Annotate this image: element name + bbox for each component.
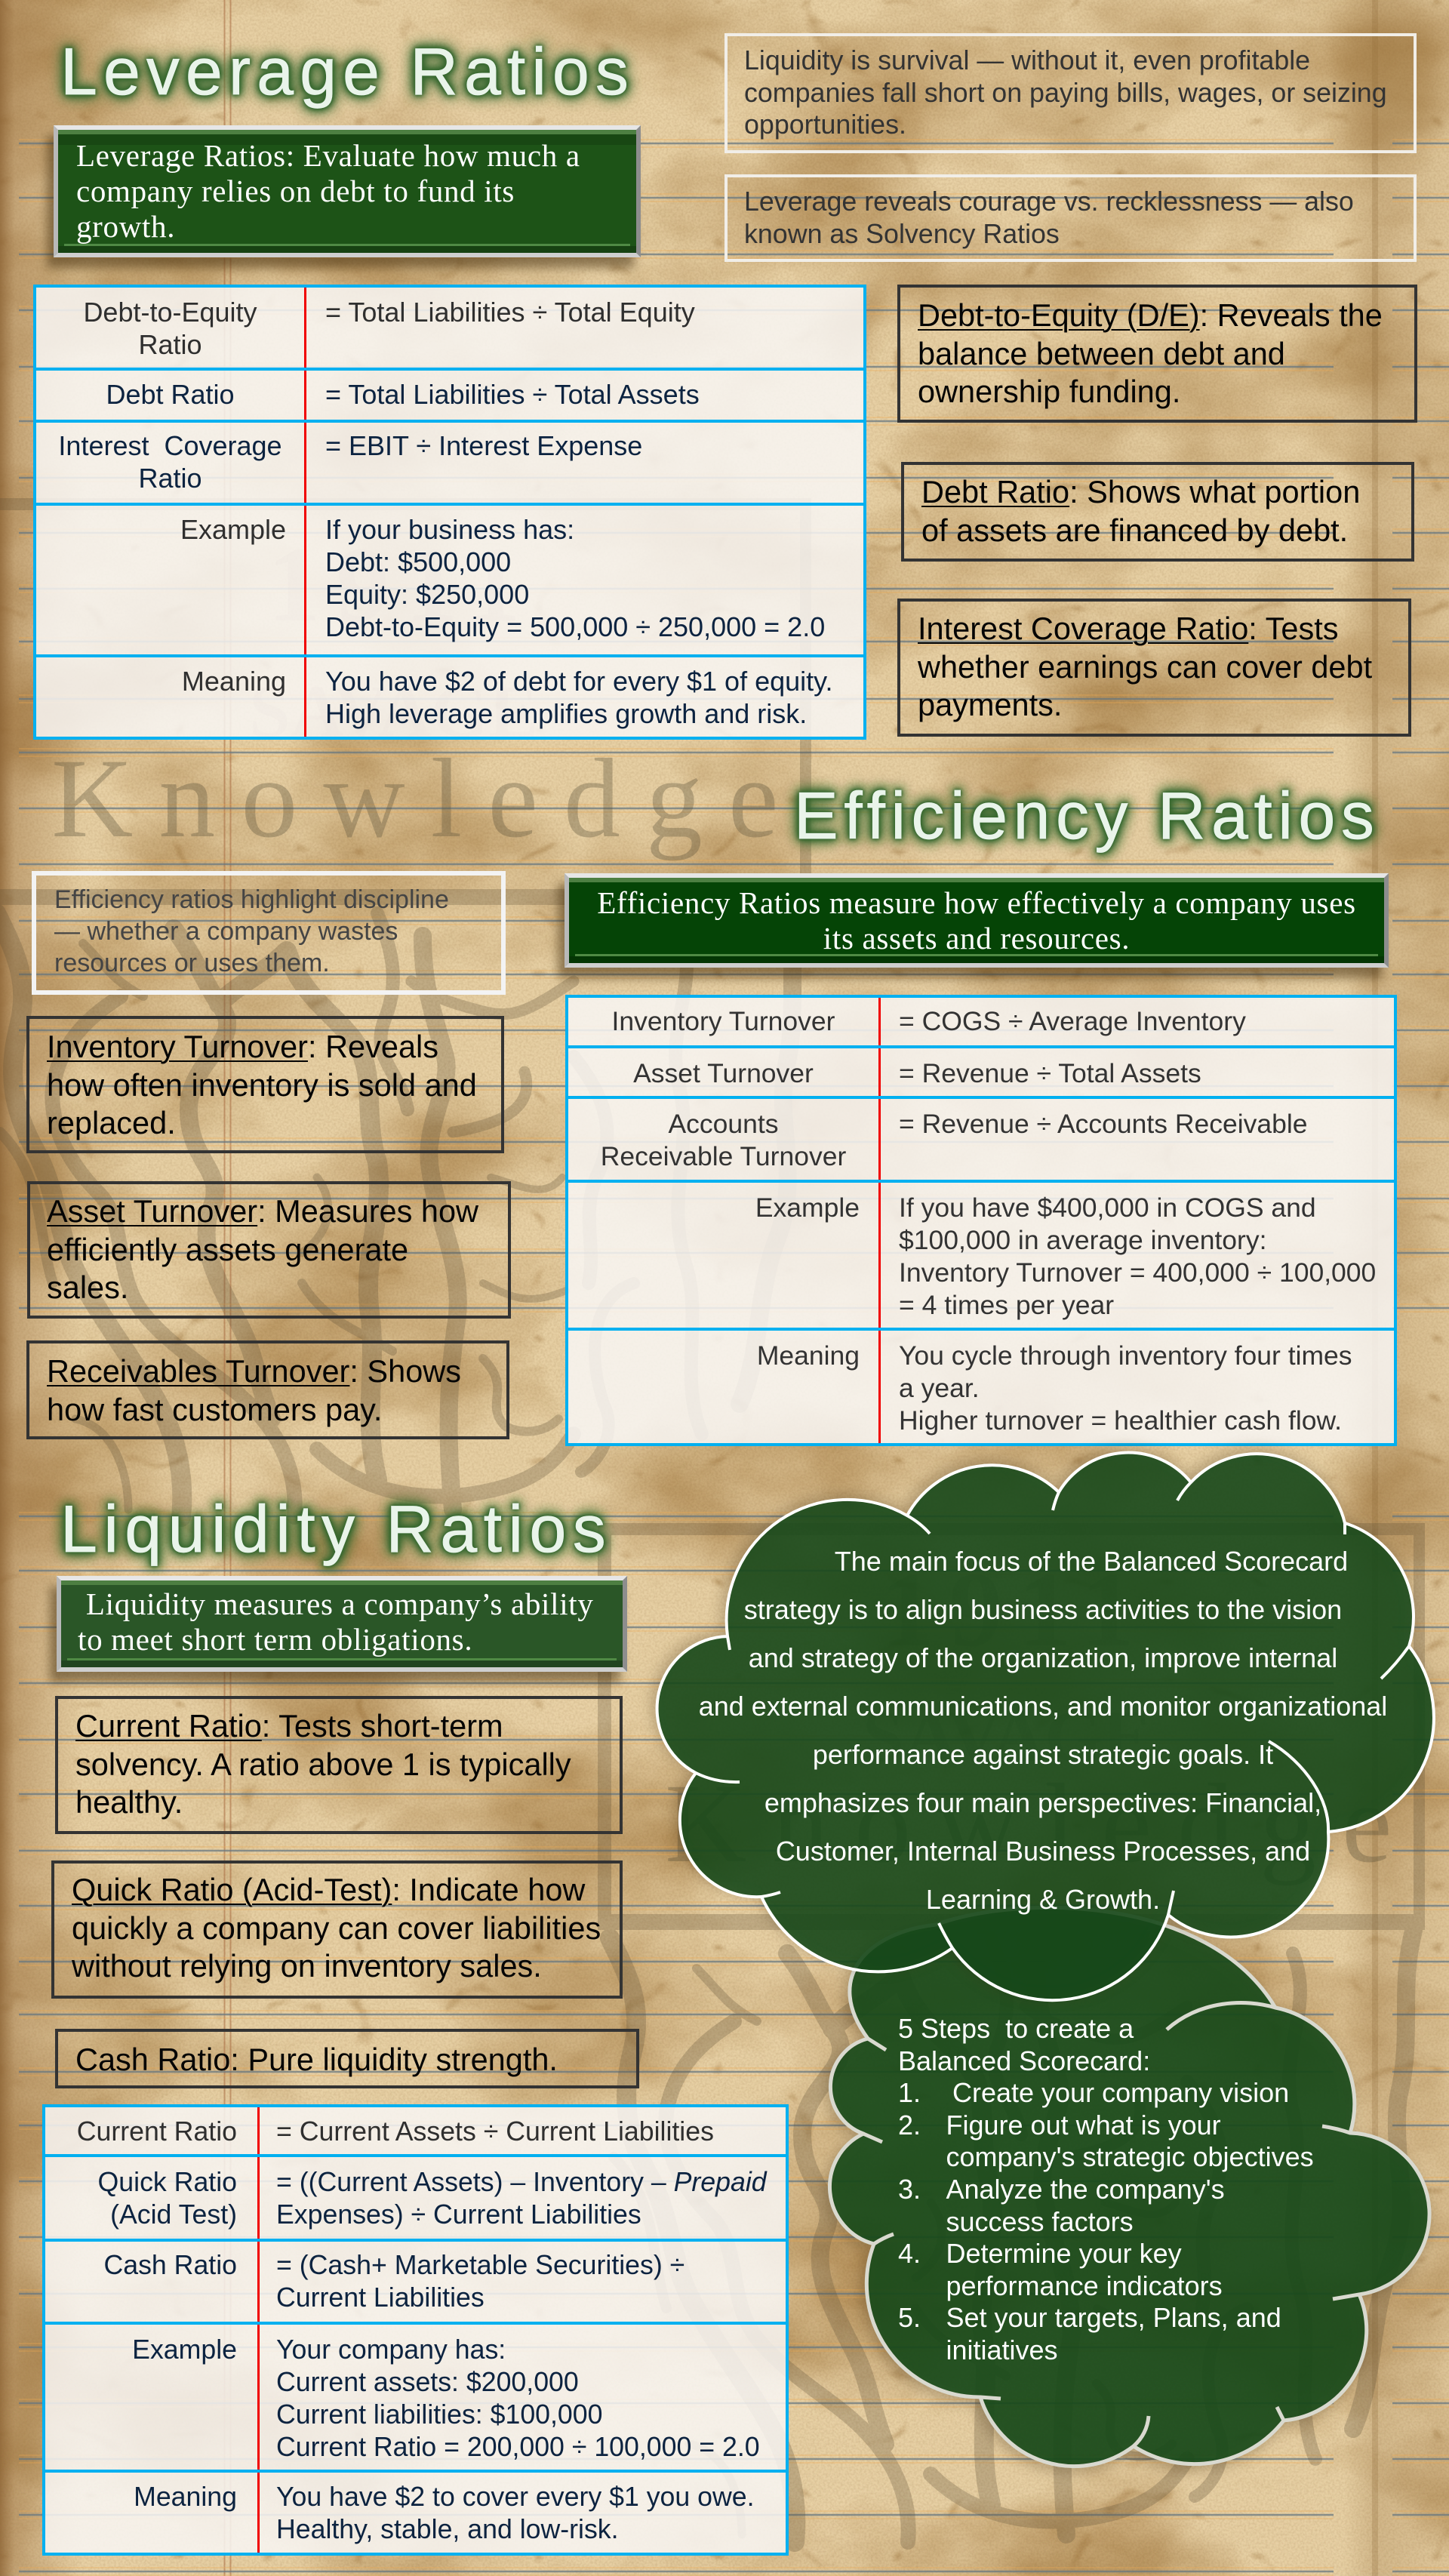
cloud: balanced scorecard main focus: Customer, Internal Business Processes, and xyxy=(776,1836,1310,1867)
banner: efficiency definition: its assets and resources. xyxy=(823,921,1130,956)
cloud: 5 steps to create a balanced scorecard: initiatives xyxy=(946,2334,1058,2365)
table: liquidity ratio formulas: = (Cash+ Marketable Securities) ÷ xyxy=(276,2250,685,2280)
callout: inventory turnover: replaced. xyxy=(47,1105,176,1140)
table: efficiency ratio formulas: You cycle through inventory four times xyxy=(899,1340,1352,1371)
banner: leverage definition: company relies on debt to fund its xyxy=(76,174,515,208)
table: efficiency ratio formulas: Inventory Turnover = 400,000 ÷ 100,000 xyxy=(899,1257,1376,1288)
table: efficiency ratio formulas: Accounts xyxy=(668,1109,779,1139)
table: liquidity ratio formulas: Current Ratio = 200,000 ÷ 100,000 = 2.0 xyxy=(276,2432,760,2462)
callout: current ratio: healthy. xyxy=(75,1784,183,1820)
table: efficiency ratio formulas: Higher turnover = healthier cash flow. xyxy=(899,1405,1342,1436)
table: leverage ratio formulas: = Total Liabilities ÷ Total Equity xyxy=(325,297,695,328)
cloud: 5 steps to create a balanced scorecard: Set your targets, Plans, and xyxy=(946,2302,1281,2333)
note: leverage courage vs recklessness xyxy=(724,174,1417,262)
callout: asset turnover: sales. xyxy=(47,1270,128,1305)
callout: debt ratio: Debt Ratio: Shows what portion xyxy=(921,474,1360,509)
callout: current ratio xyxy=(55,1696,623,1834)
table: liquidity ratio formulas: Expenses) ÷ Current Liabilities xyxy=(276,2199,641,2230)
table: efficiency ratio formulas: Example xyxy=(755,1193,860,1223)
banner: efficiency definition: Efficiency Ratios measure how effectively a company uses xyxy=(597,885,1356,920)
table: efficiency ratio formulas: $100,000 in average inventory: xyxy=(899,1225,1266,1255)
cloud: balanced scorecard main focus: and strategy of the organization, improve internal xyxy=(749,1642,1337,1673)
cloud: 5 steps to create a balanced scorecard: 3. xyxy=(898,2174,921,2205)
callout: interest coverage ratio: whether earnings can cover debt xyxy=(918,649,1372,684)
callout: debt ratio: of assets are financed by debt. xyxy=(921,512,1348,548)
table: leverage ratio formulas xyxy=(33,285,866,740)
heading: Liquidity Ratios: Liquidity Ratios xyxy=(60,1491,612,1566)
table: liquidity ratio formulas: Healthy, stable, and low-risk. xyxy=(276,2514,619,2544)
table: leverage ratio formulas: Equity: $250,000 xyxy=(325,579,529,610)
background: crumpled ruled paper with watermark: 1911 xyxy=(881,1550,1149,1669)
callout: interest coverage ratio: payments. xyxy=(918,687,1062,722)
table: liquidity ratio formulas: Meaning xyxy=(134,2482,237,2512)
table: leverage ratio formulas: High leverage amplifies growth and risk. xyxy=(325,698,807,729)
table: leverage ratio formulas: Debt-to-Equity xyxy=(83,297,257,328)
table: leverage ratio formulas: Ratio xyxy=(138,329,202,360)
banner: liquidity definition xyxy=(57,1576,627,1672)
table: liquidity ratio formulas: = ((Current Assets) – Inventory – Prepaid xyxy=(276,2167,767,2197)
table: liquidity ratio formulas: You have $2 to cover every $1 you owe. xyxy=(276,2482,755,2512)
cloud: balanced scorecard main focus: strategy is to align business activities to the vision xyxy=(744,1594,1342,1625)
table: liquidity ratio formulas: Current liabilities: $100,000 xyxy=(276,2399,602,2430)
cloud: 5 steps to create a balanced scorecard: performance indicators xyxy=(946,2270,1223,2301)
table: liquidity ratio formulas: = Current Assets ÷ Current Liabilities xyxy=(276,2116,714,2147)
cloud: 5 steps to create a balanced scorecard: 1. xyxy=(898,2077,921,2108)
note: leverage courage vs recklessness: Leverage reveals courage vs. recklessness — also xyxy=(744,186,1354,217)
cloud: 5 steps to create a balanced scorecard: Analyze the company's xyxy=(946,2174,1225,2205)
heading: Leverage Ratios: Leverage Ratios xyxy=(60,34,635,109)
table: liquidity ratio formulas: Current assets: $200,000 xyxy=(276,2367,579,2397)
callout: interest coverage ratio: Interest Coverage Ratio: Tests xyxy=(918,611,1338,646)
table: liquidity ratio formulas: Your company has: xyxy=(276,2334,506,2365)
banner: leverage definition: growth. xyxy=(76,209,175,244)
callout: debt ratio xyxy=(901,462,1414,562)
cloud: balanced scorecard main focus: The main focus of the Balanced Scorecard xyxy=(835,1546,1348,1577)
table: leverage ratio formulas: Ratio xyxy=(138,463,202,494)
background: crumpled ruled paper with watermark: Knowledge xyxy=(51,736,804,861)
callout: cash ratio: Cash Ratio: Pure liquidity strength. xyxy=(75,2042,558,2077)
background: crumpled ruled paper with watermark: SAVAGE xyxy=(863,1696,1152,1777)
table: leverage ratio formulas: = EBIT ÷ Interest Expense xyxy=(325,430,642,461)
table: leverage ratio formulas: Example xyxy=(180,514,286,545)
note: leverage courage vs recklessness: known as Solvency Ratios xyxy=(744,219,1060,249)
cloud: 5 steps to create a balanced scorecard: Determine your key xyxy=(946,2238,1182,2269)
callout: receivables turnover: how fast customers pay. xyxy=(47,1392,382,1426)
cloud: balanced scorecard main focus: and external communications, and monitor organizational xyxy=(699,1691,1387,1722)
callout: inventory turnover xyxy=(26,1016,504,1153)
table: efficiency ratio formulas: = 4 times per year xyxy=(899,1290,1114,1320)
callout: quick ratio: quickly a company can cover liabilities xyxy=(72,1910,601,1946)
cloud: 5 steps to create a balanced scorecard: 5 Steps to create a xyxy=(898,2013,1134,2044)
table: efficiency ratio formulas: = Revenue ÷ Total Assets xyxy=(899,1058,1201,1088)
table: liquidity ratio formulas: Cash Ratio xyxy=(103,2250,237,2280)
table: efficiency ratio formulas: If you have $400,000 in COGS and xyxy=(899,1193,1316,1223)
note: liquidity is survival: opportunities. xyxy=(744,109,906,140)
table: liquidity ratio formulas: Current Ratio xyxy=(77,2116,237,2147)
callout: inventory turnover: Inventory Turnover: Reveals xyxy=(47,1029,438,1064)
cloud: balanced scorecard main focus: performance against strategic goals. It xyxy=(813,1739,1273,1770)
background: crumpled ruled paper with watermark: SAVAGE xyxy=(249,671,538,752)
table: liquidity ratio formulas xyxy=(42,2104,789,2556)
table: leverage ratio formulas: If your business has: xyxy=(325,514,574,545)
banner: leverage definition xyxy=(54,125,641,257)
note: efficiency discipline: Efficiency ratios highlight discipline xyxy=(54,885,449,914)
callout: asset turnover: Asset Turnover: Measures how xyxy=(47,1193,478,1229)
banner: leverage definition: Leverage Ratios: Evaluate how much a xyxy=(76,138,580,173)
cloud: 5 steps to create a balanced scorecard xyxy=(820,1906,1434,2479)
table: liquidity ratio formulas: Current Liabilities xyxy=(276,2282,485,2313)
banner: liquidity definition: to meet short term obligations. xyxy=(78,1622,472,1657)
table: efficiency ratio formulas xyxy=(565,995,1397,1446)
callout: debt-to-equity: balance between debt and xyxy=(918,335,1285,371)
note: efficiency discipline: resources or uses them. xyxy=(54,949,330,977)
callout: quick ratio xyxy=(51,1860,623,1999)
table: liquidity ratio formulas: Example xyxy=(132,2334,237,2365)
table: efficiency ratio formulas: a year. xyxy=(899,1373,980,1403)
cloud: balanced scorecard main focus: emphasizes four main perspectives: Financial, xyxy=(764,1787,1321,1818)
table: efficiency ratio formulas: Inventory Turnover xyxy=(611,1006,835,1036)
callout: inventory turnover: how often inventory is sold and xyxy=(47,1067,477,1102)
table: efficiency ratio formulas: = COGS ÷ Average Inventory xyxy=(899,1006,1246,1036)
callout: debt-to-equity xyxy=(897,285,1417,423)
callout: current ratio: Current Ratio: Tests short-term xyxy=(75,1708,503,1743)
cloud: 5 steps to create a balanced scorecard: 4. xyxy=(898,2238,921,2269)
note: efficiency discipline xyxy=(32,871,506,995)
table: leverage ratio formulas: You have $2 of debt for every $1 of equity. xyxy=(325,666,832,697)
callout: receivables turnover xyxy=(26,1340,509,1439)
banner: efficiency definition xyxy=(565,873,1389,968)
heading: Efficiency Ratios: Efficiency Ratios xyxy=(794,778,1380,853)
callout: receivables turnover: Receivables Turnover: Shows xyxy=(47,1353,461,1389)
callout: current ratio: solvency. A ratio above 1 is typically xyxy=(75,1747,571,1781)
note: liquidity is survival xyxy=(724,33,1417,153)
callout: debt-to-equity: Debt-to-Equity (D/E): Reveals the xyxy=(918,297,1383,333)
cloud: 5 steps to create a balanced scorecard: 5. xyxy=(898,2302,921,2333)
table: liquidity ratio formulas: Quick Ratio xyxy=(98,2167,237,2197)
callout: cash ratio xyxy=(55,2029,639,2088)
cloud: 5 steps to create a balanced scorecard: company's strategic objectives xyxy=(946,2141,1314,2172)
cloud: 5 steps to create a balanced scorecard: 2. xyxy=(898,2110,921,2141)
callout: debt-to-equity: ownership funding. xyxy=(918,374,1180,409)
table: efficiency ratio formulas: Receivable Turnover xyxy=(601,1141,846,1171)
cloud: 5 steps to create a balanced scorecard: success factors xyxy=(946,2206,1134,2237)
table: leverage ratio formulas: Meaning xyxy=(182,666,286,697)
table: leverage ratio formulas: Debt-to-Equity = 500,000 ÷ 250,000 = 2.0 xyxy=(325,611,825,642)
table: leverage ratio formulas: Debt: $500,000 xyxy=(325,546,511,577)
callout: interest coverage ratio xyxy=(897,599,1411,737)
table: efficiency ratio formulas: Meaning xyxy=(757,1340,860,1371)
callout: quick ratio: without relying on inventory sales. xyxy=(72,1948,542,1984)
table: efficiency ratio formulas: Asset Turnover xyxy=(633,1058,814,1088)
cloud: balanced scorecard main focus xyxy=(646,1440,1437,2468)
background: crumpled ruled paper with watermark: Knowledge xyxy=(665,1761,1417,1886)
table: leverage ratio formulas: Interest Coverage xyxy=(58,430,282,461)
note: liquidity is survival: companies fall short on paying bills, wages, or seizing xyxy=(744,77,1387,107)
cloud: balanced scorecard main focus: Learning & Growth. xyxy=(926,1884,1160,1915)
note: liquidity is survival: Liquidity is survival — without it, even profitable xyxy=(744,45,1310,75)
table: leverage ratio formulas: = Total Liabilities ÷ Total Assets xyxy=(325,379,700,410)
cloud: 5 steps to create a balanced scorecard: Figure out what is your xyxy=(946,2110,1221,2141)
table: leverage ratio formulas: Debt Ratio xyxy=(106,379,235,410)
callout: asset turnover: efficiently assets generate xyxy=(47,1232,408,1266)
cloud: 5 steps to create a balanced scorecard: Create your company vision xyxy=(952,2077,1289,2108)
callout: asset turnover xyxy=(27,1181,511,1319)
table: liquidity ratio formulas: (Acid Test) xyxy=(110,2199,237,2230)
table: efficiency ratio formulas: = Revenue ÷ Accounts Receivable xyxy=(899,1109,1307,1139)
cloud: 5 steps to create a balanced scorecard: Balanced Scorecard: xyxy=(898,2045,1150,2076)
note: efficiency discipline: — whether a company wastes xyxy=(54,917,398,946)
callout: quick ratio: Quick Ratio (Acid-Test): Indicate how xyxy=(72,1872,585,1907)
background: crumpled ruled paper with watermark: 1911 xyxy=(267,525,536,644)
banner: liquidity definition: Liquidity measures a company’s ability xyxy=(86,1587,594,1621)
